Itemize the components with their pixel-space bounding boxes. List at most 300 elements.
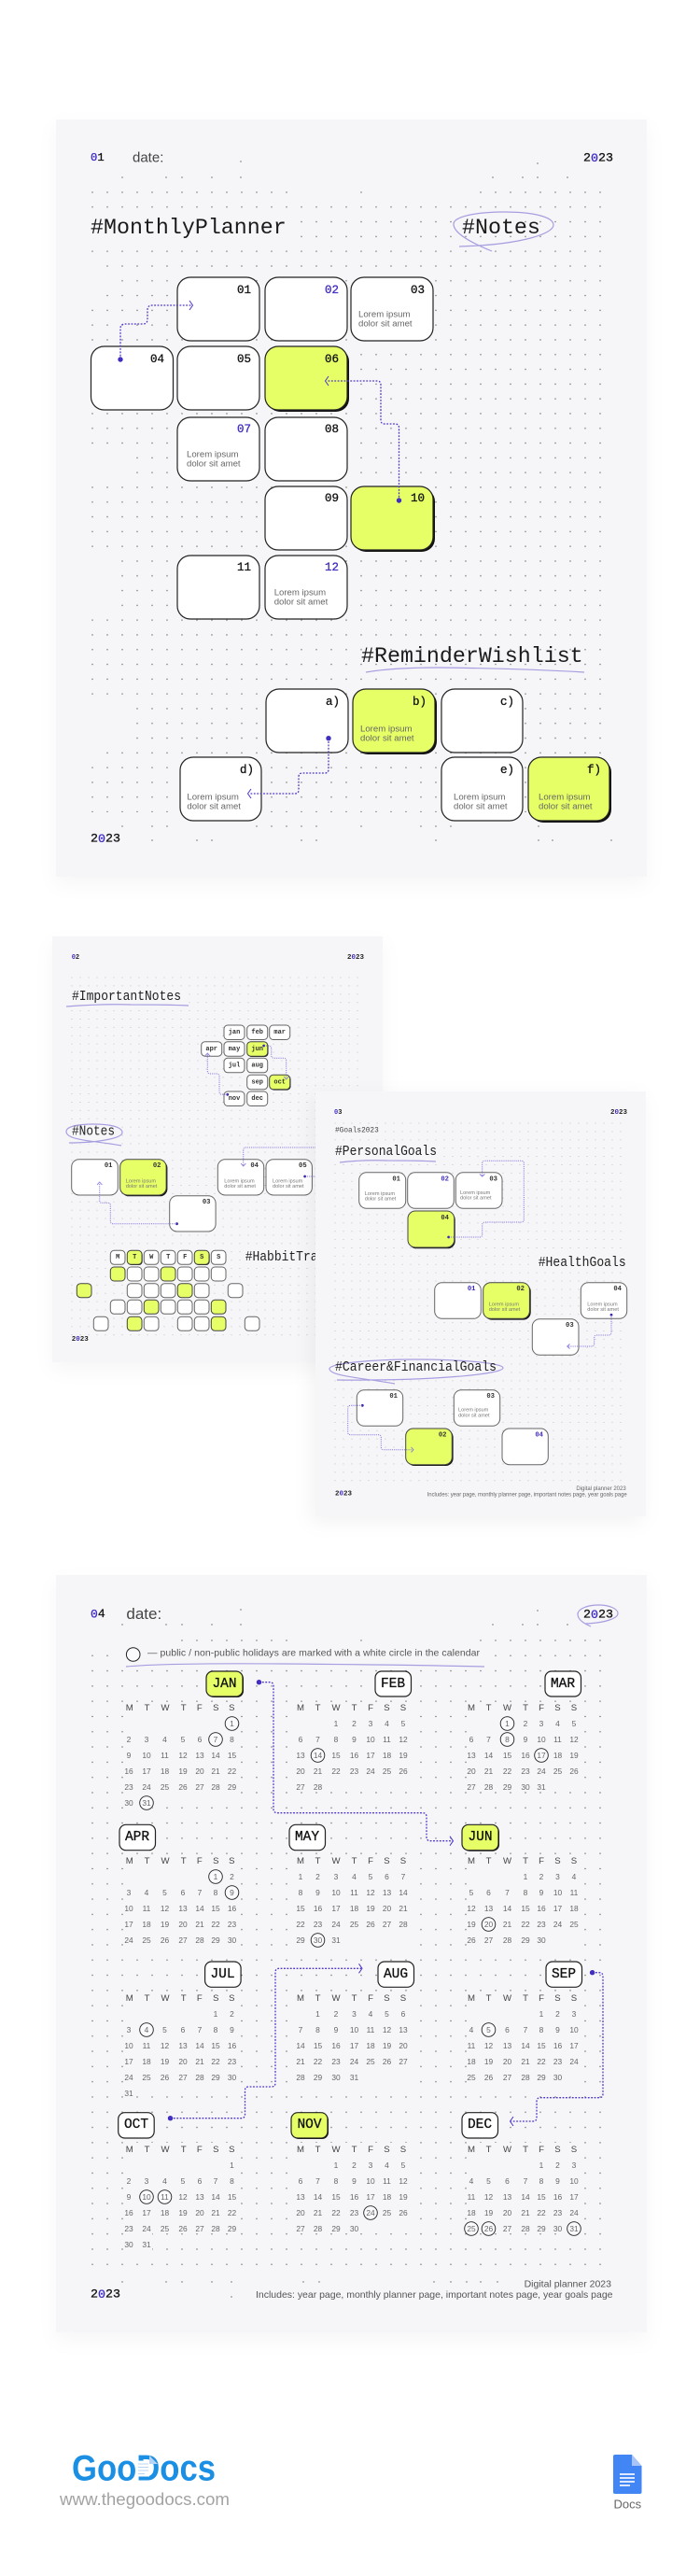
card 12: 12 <box>325 561 339 574</box>
calendar July: 16 <box>228 2041 236 2050</box>
legend: holiday circle: — public / non-public holidays are marked with a white circle in the calendar <box>147 1648 480 1659</box>
calendar July: T <box>145 1992 150 2004</box>
calendar July: 22 <box>211 2057 220 2066</box>
month pill jul <box>224 1058 245 1073</box>
calendar October: 19 <box>178 2208 188 2217</box>
calendar August: 15 <box>314 2041 322 2050</box>
calendar October: 24 <box>142 2224 151 2233</box>
card 08 <box>265 417 347 481</box>
calendar April: S <box>213 1856 219 1865</box>
calendar October: 22 <box>228 2208 236 2217</box>
card c: c) <box>500 696 514 709</box>
calendar November: S <box>400 2144 406 2155</box>
calendar June <box>467 1856 579 1945</box>
calendar April: M <box>126 1856 133 1865</box>
calendar November: 21 <box>314 2208 322 2217</box>
calendar February: T <box>352 1703 357 1712</box>
calendar February: T <box>315 1703 321 1712</box>
calendar October: 16 <box>124 2208 133 2217</box>
card b highlighted: dolor sit amet <box>360 734 414 743</box>
note card 02 highlighted: dolor sit amet <box>126 1184 158 1189</box>
calendar June: 22 <box>521 1920 530 1929</box>
calendar March: 26 <box>569 1767 579 1776</box>
calendar December: S <box>571 2144 577 2155</box>
calendar December: 6 <box>505 2176 510 2186</box>
calendar December: 15 <box>537 2192 546 2202</box>
calendar May: 21 <box>399 1904 408 1913</box>
year with scribble <box>578 1605 618 1626</box>
calendar November: F <box>368 2144 373 2155</box>
calendar April: 10 <box>124 1904 133 1913</box>
calendar April: 24 <box>124 1936 133 1945</box>
habit tracker weekday headers: M <box>116 1254 119 1261</box>
calendar January: 9 <box>127 1751 132 1760</box>
month pill may: may <box>229 1046 241 1053</box>
calendar September: 26 <box>484 2073 493 2082</box>
calendar July: S <box>213 1992 219 2004</box>
calendar December: T <box>486 2144 492 2155</box>
calendar February: 6 <box>299 1735 303 1744</box>
calendar August: 10 <box>350 2025 358 2034</box>
calendar May: 12 <box>366 1888 375 1897</box>
page number 03: 03 <box>334 1109 342 1117</box>
calendar January: 19 <box>178 1767 188 1776</box>
month label FEB: FEB <box>381 1677 405 1692</box>
habit tracker weekday headers: W <box>149 1254 154 1261</box>
calendar September: 8 <box>539 2025 544 2034</box>
calendar October: M <box>126 2144 133 2155</box>
calendar May: 5 <box>369 1872 373 1881</box>
month label MAR: MAR <box>551 1677 575 1692</box>
calendar May: 16 <box>314 1904 322 1913</box>
calendar October: 25 <box>161 2224 169 2233</box>
calendar January: F <box>197 1703 203 1712</box>
calendar March: 8 <box>505 1735 510 1744</box>
note card 04: dolor sit amet <box>224 1184 256 1189</box>
habit tracker weekday headers: T <box>166 1254 170 1261</box>
personal card 03: Lorem ipsum <box>460 1190 491 1196</box>
calendar September <box>467 1992 579 2082</box>
calendar October: 18 <box>161 2208 169 2217</box>
calendar November: 28 <box>314 2224 322 2233</box>
calendar April: 3 <box>127 1888 132 1897</box>
calendar March: T <box>523 1703 528 1712</box>
calendar May: 1 <box>299 1872 303 1881</box>
month label AUG: AUG <box>384 1967 408 1982</box>
arrow: career card 01 to 02 <box>348 1404 413 1452</box>
calendar December: 25 <box>467 2224 476 2233</box>
calendar May: 7 <box>401 1872 406 1881</box>
calendar June: 21 <box>503 1920 511 1929</box>
calendar February: 2 <box>352 1719 357 1728</box>
note card 03: 03 <box>203 1199 211 1206</box>
health card 02 highlighted: dolor sit amet <box>489 1307 521 1313</box>
calendar February: S <box>384 1703 390 1712</box>
month label NOV <box>291 2113 329 2139</box>
calendar September: 15 <box>537 2041 546 2050</box>
note card 05 <box>266 1160 312 1195</box>
calendar October: 29 <box>228 2224 236 2233</box>
health card 02 highlighted <box>483 1283 531 1320</box>
calendar June: 15 <box>521 1904 530 1913</box>
calendar July: 12 <box>161 2041 169 2050</box>
calendar February: 22 <box>331 1767 341 1776</box>
calendar September: F <box>539 1992 544 2004</box>
note card 02 highlighted: Lorem ipsum <box>126 1178 156 1184</box>
calendar March: 16 <box>521 1751 530 1760</box>
calendar September: 22 <box>537 2057 546 2066</box>
calendar September: 27 <box>503 2073 511 2082</box>
calendar January: 6 <box>198 1735 203 1744</box>
card d: Lorem ipsum <box>187 792 239 803</box>
arrow: card 10 to card 06 <box>325 376 401 503</box>
calendar October: T <box>145 2144 150 2155</box>
calendar December: 27 <box>503 2224 511 2233</box>
calendar August: S <box>384 1992 390 2004</box>
calendar December: 9 <box>555 2176 560 2186</box>
calendar April: 26 <box>161 1936 169 1945</box>
card 01: 01 <box>237 284 251 297</box>
calendar July: 30 <box>228 2073 236 2082</box>
calendar May: 30 <box>314 1936 322 1945</box>
calendar September: 16 <box>553 2041 562 2050</box>
calendar July: T <box>181 1992 187 2004</box>
calendar April <box>124 1856 239 1945</box>
month label DEC <box>462 2113 498 2138</box>
calendar November: 18 <box>383 2192 391 2202</box>
calendar August: 5 <box>385 2009 389 2019</box>
calendar May: 22 <box>296 1920 305 1929</box>
calendar February: M <box>297 1703 304 1712</box>
calendar May: 25 <box>350 1920 358 1929</box>
health card 04 <box>581 1283 627 1318</box>
calendar March: 2 <box>524 1719 528 1728</box>
date label: date: <box>126 1605 161 1623</box>
calendar November: M <box>297 2144 304 2155</box>
month pill jul: jul <box>229 1063 240 1070</box>
calendar April: 27 <box>178 1936 188 1945</box>
calendar September: 28 <box>521 2073 530 2082</box>
calendar November: 23 <box>350 2208 358 2217</box>
calendar August: 2 <box>334 2009 339 2019</box>
note card 05: dolor sit amet <box>273 1184 304 1189</box>
calendar February: 5 <box>401 1719 406 1728</box>
calendar March: 7 <box>486 1735 491 1744</box>
calendar February: 13 <box>296 1751 305 1760</box>
heading: important notes: #ImportantNotes <box>72 990 181 1005</box>
health card 04: dolor sit amet <box>587 1307 619 1313</box>
calendar November: 8 <box>334 2176 339 2186</box>
calendar June: T <box>523 1856 528 1865</box>
calendar April: 9 <box>230 1888 234 1897</box>
calendar August: T <box>352 1992 357 2004</box>
calendar February: 20 <box>296 1767 305 1776</box>
calendar July: 6 <box>181 2025 186 2034</box>
calendar February: 1 <box>334 1719 339 1728</box>
calendar March: 25 <box>553 1767 562 1776</box>
calendar June: 8 <box>524 1888 528 1897</box>
calendar November: 24 <box>366 2208 375 2217</box>
calendar January: S <box>213 1703 219 1712</box>
calendar July: 13 <box>178 2041 188 2050</box>
habit tracker grid <box>77 1267 259 1330</box>
heading: notes with scribble <box>454 212 553 251</box>
panel: page 1 monthly planner <box>56 120 647 877</box>
calendar April: 14 <box>195 1904 204 1913</box>
calendar January: 7 <box>214 1735 218 1744</box>
month pill dec: dec <box>251 1095 263 1103</box>
calendar January: T <box>181 1703 187 1712</box>
calendar January: 27 <box>195 1782 204 1792</box>
arrow: card 05 to card 04 via page edge <box>241 1147 322 1177</box>
career card 03: dolor sit amet <box>458 1413 490 1418</box>
month pill feb: feb <box>251 1029 263 1036</box>
calendar December: 5 <box>486 2176 491 2186</box>
calendar December: 30 <box>553 2224 562 2233</box>
icon: Google Docs <box>613 2455 642 2512</box>
month label SEP <box>546 1962 582 1987</box>
calendar March: 10 <box>537 1735 546 1744</box>
calendar October: S <box>229 2144 235 2155</box>
calendar May: 20 <box>383 1904 391 1913</box>
calendar August: T <box>315 1992 321 2004</box>
note card 02 highlighted <box>120 1160 167 1196</box>
calendar June: 26 <box>467 1936 476 1945</box>
calendar July: W <box>161 1992 170 2004</box>
calendar December <box>465 2144 581 2235</box>
calendar May: 28 <box>399 1920 408 1929</box>
calendar February: 8 <box>334 1735 339 1744</box>
card 09 <box>265 486 347 550</box>
calendar January: 30 <box>124 1798 133 1808</box>
calendar December: 11 <box>468 2192 476 2202</box>
calendar December: W <box>503 2144 512 2155</box>
calendar March: M <box>468 1703 475 1712</box>
calendar June: F <box>539 1856 544 1865</box>
calendar March: 19 <box>569 1751 579 1760</box>
footer note: Includes: year page, monthly planner page, important notes page, year goals page <box>427 1492 627 1498</box>
calendar June: 23 <box>537 1920 546 1929</box>
health card 03 <box>532 1319 579 1355</box>
calendar April: 18 <box>142 1920 151 1929</box>
calendar May: S <box>384 1856 390 1865</box>
card e: Lorem ipsum <box>454 792 505 803</box>
card 06 highlighted: 06 <box>325 353 339 366</box>
arrow: nov to apr <box>205 1053 229 1096</box>
calendar September: 24 <box>569 2057 579 2066</box>
calendar August: 17 <box>350 2041 358 2050</box>
calendar November: T <box>315 2144 321 2155</box>
website url: www.thegoodocs.com <box>59 2490 230 2509</box>
year top: 2023 <box>347 954 365 962</box>
calendar July: 17 <box>124 2057 133 2066</box>
calendar May: M <box>297 1856 304 1865</box>
calendar August: 22 <box>314 2057 322 2066</box>
calendar January: T <box>145 1703 150 1712</box>
calendar March: 27 <box>467 1782 476 1792</box>
calendar May: 3 <box>334 1872 339 1881</box>
calendar February: 25 <box>383 1767 391 1776</box>
calendar March: 6 <box>469 1735 474 1744</box>
card 11: 11 <box>237 561 251 574</box>
calendar January: 20 <box>195 1767 204 1776</box>
calendar January: 2 <box>127 1735 132 1744</box>
health card 04: Lorem ipsum <box>587 1302 618 1307</box>
page number 04: 04 <box>91 1607 105 1621</box>
calendar June: 2 <box>539 1872 544 1881</box>
card 07 <box>177 417 259 481</box>
calendar July: 5 <box>162 2025 167 2034</box>
month label JUL <box>205 1962 241 1987</box>
personal card 01: Lorem ipsum <box>365 1191 395 1197</box>
calendar June: 18 <box>569 1904 579 1913</box>
calendar July: 27 <box>178 2073 188 2082</box>
calendar February: W <box>331 1703 341 1712</box>
calendar December: 26 <box>484 2224 493 2233</box>
month pill feb <box>247 1025 268 1040</box>
calendar April: 23 <box>228 1920 236 1929</box>
calendar August: 19 <box>383 2041 391 2050</box>
calendar January: 21 <box>211 1767 220 1776</box>
calendar November: 29 <box>331 2224 341 2233</box>
calendar September: 17 <box>569 2041 579 2050</box>
date label: date: <box>133 149 163 166</box>
calendar June: 11 <box>570 1888 579 1897</box>
calendar August: 30 <box>331 2073 341 2082</box>
calendar March: T <box>486 1703 492 1712</box>
arrow: jun to oct <box>262 1045 288 1079</box>
note card 01 <box>72 1160 118 1195</box>
year top: 2023 <box>583 151 613 164</box>
year bottom: 2023 <box>91 2287 120 2301</box>
calendar October: 26 <box>178 2224 188 2233</box>
calendar September: 9 <box>555 2025 560 2034</box>
calendar January: M <box>126 1703 133 1712</box>
footer note: Includes: year page, monthly planner page, important notes page, year goals page <box>256 2289 613 2301</box>
heading: habit tracker: #HabbitTracker <box>245 1250 347 1265</box>
calendar August: 14 <box>296 2041 305 2050</box>
calendar December: 28 <box>521 2224 530 2233</box>
year with scribble: 2023 <box>583 1608 613 1621</box>
calendar April: 5 <box>162 1888 167 1897</box>
calendar October: 9 <box>127 2192 132 2202</box>
calendar April: 2 <box>230 1872 234 1881</box>
calendar September: 19 <box>484 2057 493 2066</box>
month pill may <box>224 1042 245 1056</box>
calendar August: 3 <box>352 2009 357 2019</box>
arrow: card 04 to card 01 <box>118 301 192 362</box>
calendar August: 31 <box>350 2073 358 2082</box>
career card 01: 01 <box>389 1393 399 1401</box>
month pill sep <box>247 1075 268 1090</box>
logo: GooDocs: GooDocs <box>72 2448 216 2489</box>
calendar December: 19 <box>484 2208 493 2217</box>
card 03: Lorem ipsum <box>358 310 410 319</box>
calendar September: 14 <box>521 2041 530 2050</box>
arrow: card a to card d <box>248 736 331 798</box>
calendar September: 18 <box>467 2057 476 2066</box>
calendar February: 27 <box>296 1782 305 1792</box>
calendar November: 9 <box>352 2176 357 2186</box>
calendar August: 27 <box>399 2057 408 2066</box>
calendar December: 1 <box>539 2161 544 2170</box>
heading: notes with scribble: #Notes <box>462 216 540 240</box>
calendar June: 12 <box>467 1904 476 1913</box>
personal card 01 <box>359 1173 406 1208</box>
card 12 <box>265 556 347 619</box>
calendar February: 18 <box>383 1751 391 1760</box>
calendar December: 3 <box>572 2161 577 2170</box>
calendar February: 24 <box>366 1767 375 1776</box>
calendar June: S <box>554 1856 561 1865</box>
calendar February: 23 <box>350 1767 358 1776</box>
calendar June: 17 <box>553 1904 562 1913</box>
calendar March: 9 <box>524 1735 528 1744</box>
card 06 highlighted <box>265 346 349 412</box>
calendar March: 24 <box>537 1767 546 1776</box>
card e: e) <box>500 764 514 777</box>
calendar December: 24 <box>569 2208 579 2217</box>
calendar October: F <box>197 2144 203 2155</box>
card d: d) <box>240 764 254 777</box>
calendar January: 10 <box>142 1751 151 1760</box>
calendar February: 12 <box>399 1735 408 1744</box>
calendar January: 23 <box>124 1782 133 1792</box>
calendar November: 30 <box>350 2224 358 2233</box>
calendar March: 29 <box>503 1782 511 1792</box>
card 07: Lorem ipsum <box>187 450 238 459</box>
calendar October: 21 <box>211 2208 220 2217</box>
month label AUG <box>378 1962 414 1987</box>
calendar July: 11 <box>143 2041 151 2050</box>
calendar June: 27 <box>484 1936 493 1945</box>
calendar August: 20 <box>399 2041 408 2050</box>
card e <box>441 757 523 821</box>
calendar July: F <box>197 1992 203 2004</box>
month label JUL: JUL <box>210 1967 235 1982</box>
calendar February: 26 <box>399 1767 408 1776</box>
card 03: 03 <box>411 284 425 297</box>
month pill oct highlighted: oct <box>273 1079 286 1087</box>
heading: career and financial goals with scribble: #Career&FinancialGoals <box>335 1360 497 1375</box>
month label APR <box>119 1824 155 1851</box>
personal card 02: 02 <box>441 1175 449 1183</box>
calendar May: 14 <box>399 1888 408 1897</box>
calendar March: 23 <box>521 1767 530 1776</box>
year bottom: 2023 <box>335 1491 353 1499</box>
calendar December: 29 <box>537 2224 546 2233</box>
calendar May: 15 <box>296 1904 305 1913</box>
calendar February: 9 <box>352 1735 357 1744</box>
calendar May: 31 <box>331 1936 341 1945</box>
calendar November: 12 <box>399 2176 408 2186</box>
calendar January: 3 <box>145 1735 149 1744</box>
health card 03: 03 <box>566 1322 574 1330</box>
card 09: 09 <box>325 492 339 505</box>
panel: page 2 important notes <box>52 936 383 1362</box>
calendar November: 17 <box>366 2192 375 2202</box>
icon: Google Docs: Docs <box>613 2497 642 2512</box>
calendar April: 30 <box>228 1936 236 1945</box>
month label FEB <box>375 1671 411 1696</box>
panel: page 4 year calendar <box>56 1575 647 2332</box>
calendar April: 20 <box>178 1920 188 1929</box>
calendar July: 20 <box>178 2057 188 2066</box>
calendar January: 24 <box>142 1782 151 1792</box>
calendar August: 24 <box>350 2057 358 2066</box>
card 07: dolor sit amet <box>187 459 241 469</box>
calendar March <box>467 1703 579 1792</box>
